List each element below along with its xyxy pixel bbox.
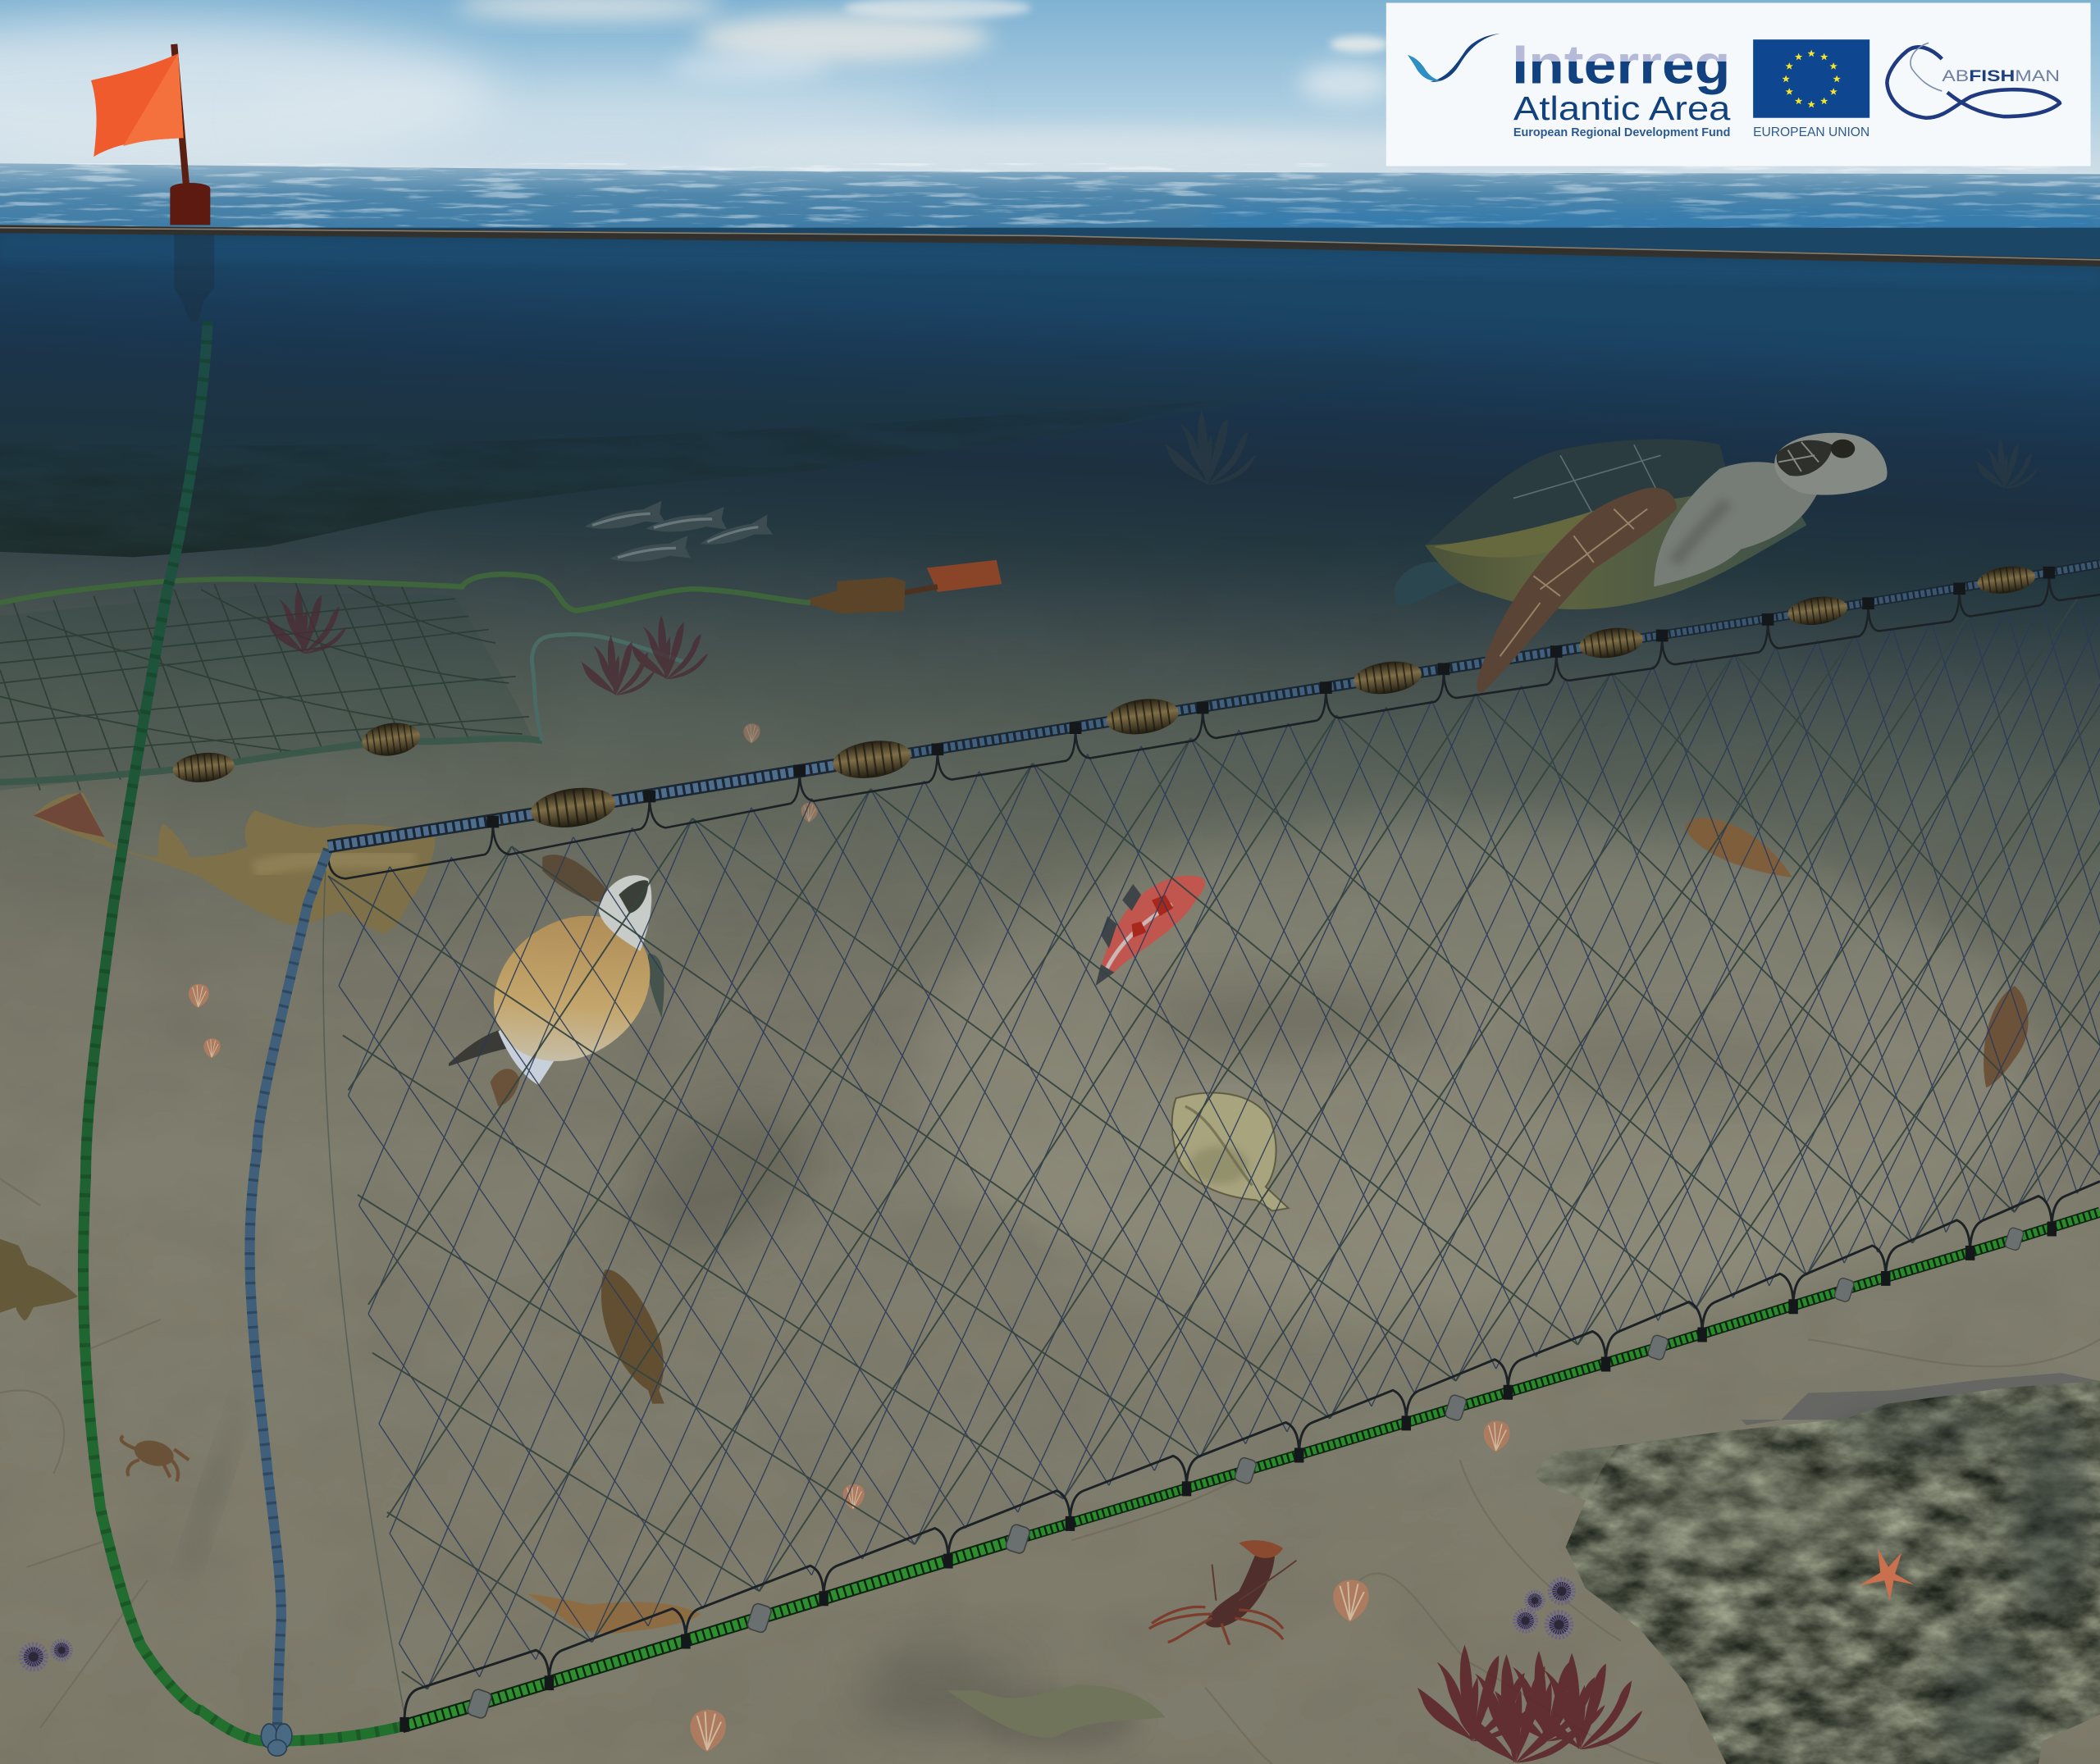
distant net <box>0 574 810 791</box>
scallops <box>189 723 1510 1752</box>
European Union caption: EUROPEAN UNION <box>1753 125 1869 139</box>
head <box>1774 433 1888 495</box>
fine navy mesh <box>328 539 2100 1689</box>
floating surface buoy and flag <box>91 44 214 321</box>
ABFISHMAN fish logo: AB FISH MAN <box>1942 67 2060 85</box>
rock texture <box>1535 1381 2100 1764</box>
European flag <box>1753 39 1869 118</box>
sea surface <box>0 163 2100 268</box>
neck <box>1654 462 1821 586</box>
sand cracks <box>0 1178 2100 1764</box>
top float rope <box>328 564 2100 846</box>
small ray by the lead line <box>527 1594 701 1634</box>
sole near the top right <box>1685 818 1792 877</box>
large turtle front flipper over the float rope <box>1477 487 1677 692</box>
distant marker buoy on the sea bed <box>809 560 1002 613</box>
head <box>599 875 651 951</box>
seaweed: far <box>1165 410 2038 489</box>
buoy line in green <box>83 321 402 1741</box>
Atlantic Area wordmark: Atlantic Area <box>1513 89 1731 127</box>
knot of rope and line <box>261 1724 292 1756</box>
sinkers on the lead line <box>467 1227 2025 1720</box>
distant rocky hill <box>0 402 1203 558</box>
white underside <box>498 1018 556 1085</box>
green lead line <box>402 1212 2100 1726</box>
right flipper <box>648 954 664 1018</box>
large green turtle swimming <box>1395 433 1888 609</box>
entangled turtle <box>449 855 678 1106</box>
spiny lobster <box>1149 1540 1296 1645</box>
sea urchins at left <box>24 1643 69 1666</box>
turbot <box>1172 1093 1289 1210</box>
sole at far right <box>1984 986 2028 1087</box>
red seaweed <box>1418 1645 1642 1762</box>
flatfish at left edge <box>0 1239 78 1320</box>
sky <box>0 0 2100 180</box>
oyster <box>947 1685 1165 1751</box>
bottom selvedge and hanging loops <box>404 1182 2100 1721</box>
starfish <box>1859 1548 1914 1601</box>
Interreg swoosh logo <box>1408 34 1500 82</box>
flounder <box>601 1269 664 1404</box>
logo panel <box>1386 2 2091 166</box>
buoy body <box>170 183 210 225</box>
school of fish <box>582 501 773 569</box>
rock shadow <box>1741 1373 2100 1425</box>
waterline <box>0 225 2100 288</box>
fund caption: European Regional Development Fund <box>1513 126 1730 139</box>
red mullet <box>1096 876 1205 986</box>
flag <box>91 53 184 157</box>
float rope lashings <box>493 567 2049 827</box>
reflection of buoy under water <box>174 235 214 321</box>
shell <box>1425 440 1730 545</box>
coarse green mesh <box>328 533 2100 1689</box>
floats along the headline <box>528 563 2037 832</box>
top flipper <box>542 855 614 902</box>
back flipper <box>1395 562 1465 606</box>
angel shark on the sea bed <box>34 793 436 933</box>
seaweed: middle distance <box>266 587 708 695</box>
rear flipper <box>449 1028 512 1066</box>
shell <box>465 886 678 1091</box>
gillnet <box>323 533 2100 1721</box>
Interreg wordmark: Interreg <box>1512 34 1730 95</box>
sea urchins by the rock <box>1517 1582 1571 1634</box>
faint outer edge of net <box>323 871 404 1715</box>
rock with starfish <box>1535 1381 2100 1764</box>
belly <box>1425 482 1806 609</box>
crab <box>121 1436 189 1481</box>
lead line clamps <box>404 1222 2052 1732</box>
net shadows on the sand <box>178 988 1835 1728</box>
top selvedge and hanging loops <box>328 572 2100 878</box>
blue side rope <box>249 849 328 1739</box>
ABFISHMAN fish logo <box>1887 43 2060 118</box>
flag pole <box>174 44 186 185</box>
